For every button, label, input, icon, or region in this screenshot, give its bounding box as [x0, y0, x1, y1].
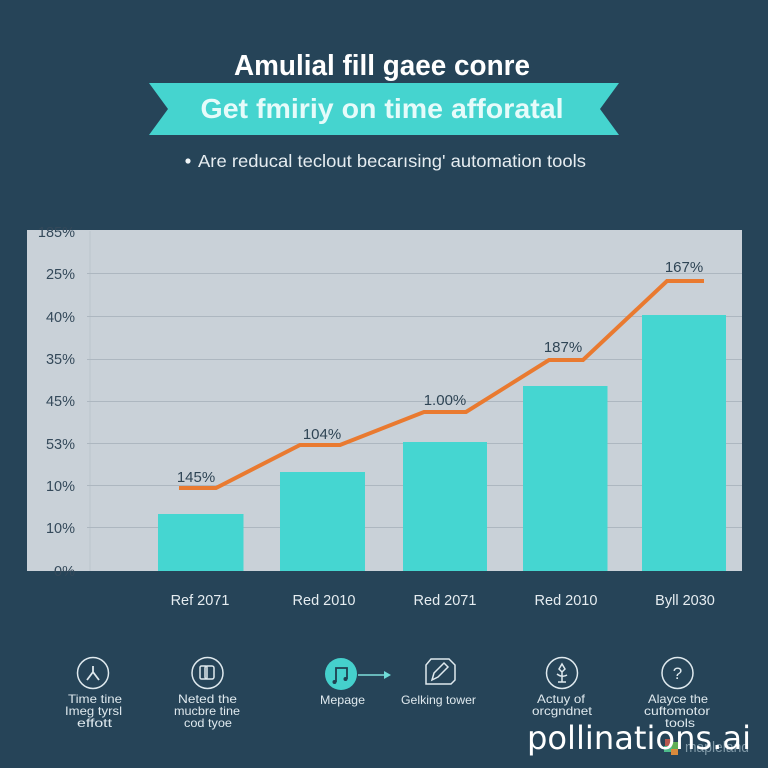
- y axis labels: 0%: [54, 564, 75, 580]
- icon item: question: Alayce the: [648, 692, 708, 706]
- bullet description: Are reducal teclout becarısing' automation tools: [198, 151, 586, 171]
- icon item: organization: [532, 658, 593, 718]
- icon item: note: mucbre tine: [174, 704, 240, 718]
- icon item: organization: orcgndnet: [532, 704, 593, 718]
- y axis labels: 25%: [46, 267, 75, 283]
- x axis labels: Ref 2071: [171, 593, 229, 609]
- icon item: time: Time tine: [68, 692, 122, 706]
- line value labels: 187%: [544, 339, 582, 356]
- icon item: question: tools: [665, 716, 695, 730]
- chart panel: [27, 225, 742, 580]
- faint logo text: mapleland: [685, 739, 749, 756]
- line value labels: [177, 259, 703, 486]
- icon item: note: [174, 658, 240, 730]
- banner subtitle: Get fmiriy on time afforatal: [200, 93, 564, 124]
- icon item: pencil: Gelking tower: [401, 693, 476, 707]
- x axis labels: [171, 593, 715, 609]
- y axis labels: 53%: [46, 437, 75, 453]
- icon item: note: Neted the: [178, 692, 237, 706]
- y axis labels: 45%: [46, 394, 75, 410]
- arrow: [358, 671, 391, 679]
- x axis labels: Red 2010: [293, 593, 355, 609]
- icon item: question: [644, 658, 710, 730]
- title: Amulial fill gaee conre: [234, 50, 530, 82]
- line value labels: 1.00%: [424, 392, 466, 409]
- bars: [158, 315, 726, 571]
- x axis labels: Red 2010: [535, 593, 597, 609]
- icon item: time: effott: [77, 716, 113, 730]
- y axis labels: 40%: [46, 310, 75, 326]
- x axis labels: Red 2071: [414, 593, 476, 609]
- line value labels: 167%: [665, 259, 703, 276]
- watermark: pollinations.ai: [527, 719, 751, 757]
- y axis labels: 10%: [46, 479, 75, 495]
- icon item: note: cod tyoe: [184, 716, 232, 730]
- icon item: music with arrow: Mepage: [320, 693, 365, 707]
- y axis labels: 35%: [46, 352, 75, 368]
- y axis labels: [38, 225, 75, 580]
- icon item: time: Imeg tyrsl: [65, 704, 122, 718]
- icon item: question: cuftomotor: [644, 704, 710, 718]
- icon item: music with arrow: [320, 658, 391, 707]
- icon item: question: ?: [673, 664, 682, 683]
- icon item: organization: Actuy of: [537, 692, 586, 706]
- y axis labels: 185%: [38, 225, 75, 241]
- line value labels: 145%: [177, 469, 215, 486]
- line value labels: 104%: [303, 426, 341, 443]
- icon item: time: [65, 658, 122, 730]
- x axis labels: Byll 2030: [655, 593, 715, 609]
- ribbon banner: [149, 83, 619, 135]
- y axis labels: 10%: [46, 521, 75, 537]
- orange trend line: [179, 281, 704, 488]
- icon item: pencil: [401, 659, 476, 707]
